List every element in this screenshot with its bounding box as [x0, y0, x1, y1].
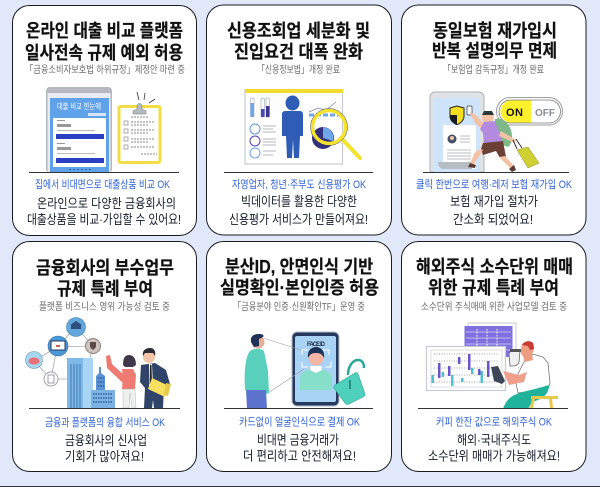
heading: financial side business: 규제 특례 부여	[57, 279, 153, 299]
body text	[243, 432, 356, 464]
panel: financial side business	[12, 242, 196, 472]
callout: 카드없이 얼굴인식으로 결제 OK	[239, 414, 361, 428]
body text: 기회가 많아져요!	[65, 449, 144, 464]
illustration: investor with stock charts	[426, 323, 558, 409]
illustration: tablet and clipboard	[46, 87, 160, 173]
heading: distributed ID and face recognition: 분산ID, 안면인식 기반	[225, 257, 373, 277]
heading: online loan comparison: 온라인 대출 비교 플랫폼	[26, 21, 183, 41]
body text	[65, 433, 147, 464]
callout: 집에서 비대면으로 대출상품 비교 OK	[35, 178, 171, 191]
heading: credit inquiry business	[227, 21, 370, 62]
panel: fractional overseas stock trading	[402, 242, 586, 472]
heading: credit inquiry business: 신용조회업 세분화 및	[227, 21, 370, 41]
body text: 빅데이터를 활용한 다양한	[241, 194, 357, 209]
illustration: credit data window	[245, 89, 360, 164]
illustration: network, buildings and business people	[26, 318, 171, 408]
callout: 클릭 한번으로 여행·레저 보험 재가입 OK	[416, 178, 573, 191]
panel: online loan comparison	[12, 6, 196, 236]
illustration: traveller and ON switch: OFF	[535, 108, 555, 119]
body text: 해외·국내주식도	[457, 432, 531, 448]
body text	[428, 432, 560, 464]
body text: 간소화 되었어요!	[453, 212, 533, 227]
panel: insurance re-enrollment	[402, 5, 586, 235]
callout: 커피 한잔 값으로 해외주식 OK	[436, 414, 553, 428]
body text	[450, 194, 538, 227]
status text: 플랫폼 비즈니스 영위 가능성 검토 중	[39, 300, 170, 313]
heading: online loan comparison	[25, 21, 183, 63]
heading: insurance re-enrollment: 동일보험 재가입시	[433, 21, 557, 41]
heading: financial side business: 금융회사의 부수업무	[36, 258, 174, 278]
illustration: tablet and clipboard: 대출 비교 한눈에	[57, 101, 101, 111]
body text	[229, 194, 368, 227]
illustration: face ID phone and lock	[245, 332, 365, 409]
status text: 소수단위 주식매매 위한 사업모델 검토 중	[421, 300, 567, 313]
heading: financial side business	[36, 258, 174, 299]
heading: fractional overseas stock trading	[416, 257, 573, 298]
body text: 비대면 금융거래가	[257, 432, 339, 448]
body text: 더 편리하고 안전해져요!	[243, 448, 356, 464]
status text: 「신용정보법」개정 완료	[257, 64, 340, 76]
callout: 금융과 플랫폼의 융합 서비스 OK	[45, 416, 166, 429]
body text	[27, 196, 181, 227]
callout: 자영업자, 청년·주부도 신용평가 OK	[232, 178, 367, 191]
heading: distributed ID and face recognition: 실명확인·본인인증 허용	[220, 278, 379, 298]
body text: 대출상품을 비교·가입할 수 있어요!	[27, 212, 181, 227]
status text: 「보험업 감독규정」개정 완료	[443, 63, 544, 76]
illustration: face ID phone and lock: FACE ID	[307, 342, 326, 348]
heading: fractional overseas stock trading: 해외주식 소수단위 매매	[416, 257, 573, 277]
body text: 금융회사의 신사업	[65, 433, 147, 448]
heading: online loan comparison: 일사전속 규제 예외 허용	[25, 43, 183, 63]
heading: credit inquiry business: 진입요건 대폭 완화	[234, 42, 363, 62]
body text: 신용평가 서비스가 만들어져요!	[229, 212, 368, 227]
panel: credit inquiry business	[206, 5, 392, 235]
body text: 소수단위 매매가 가능해져요!	[428, 448, 560, 464]
heading: insurance re-enrollment	[432, 21, 557, 61]
status text: 「금융분야 인증·신원확인TF」운영 중	[233, 301, 365, 313]
illustration: traveller and ON switch	[430, 92, 562, 172]
body text: 보험 재가입 절차가	[450, 194, 538, 209]
illustration: traveller and ON switch: ON	[506, 107, 523, 119]
heading: fractional overseas stock trading: 위한 규제 특례 부여	[428, 278, 559, 298]
heading: insurance re-enrollment: 반복 설명의무 면제	[432, 41, 557, 61]
panel: distributed ID and face recognition	[206, 242, 392, 472]
status text: 「금융소비자보호법 하위규정」제정안 마련 중	[25, 63, 185, 76]
body text: 온라인으로 다양한 금융회사의	[37, 196, 176, 211]
heading: distributed ID and face recognition	[220, 257, 379, 298]
